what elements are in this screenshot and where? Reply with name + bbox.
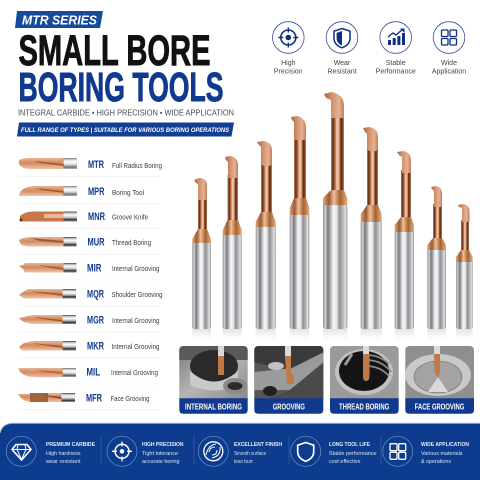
row: MPR: MPR — [88, 186, 105, 198]
benefit: wide application — [383, 436, 469, 466]
panel: internal boring — [179, 346, 248, 414]
row: MUR: MUR — [88, 236, 105, 248]
panel: grooving: GROOVING — [273, 401, 305, 411]
row: MTR: MTR — [88, 159, 104, 171]
title: BORING TOOLS — [18, 64, 223, 110]
row: MGR: Internal Grooving — [112, 318, 160, 325]
icon: wide application — [432, 22, 466, 76]
icon: stable performance: Stable — [386, 60, 406, 67]
panel: thread boring — [330, 346, 399, 414]
benefit: long tool life: LONG TOOL LIFE — [329, 442, 370, 448]
benefit: long tool life: Stable performance — [329, 451, 376, 457]
benefit: premium carbide: High hardness — [46, 451, 81, 457]
tool lineup — [192, 92, 473, 343]
row: MUR — [19, 236, 151, 248]
row: MQR: Shoulder Grooving — [112, 292, 163, 299]
benefit: excellent finish: less burr — [234, 459, 253, 465]
title: SMALL BORE — [18, 27, 210, 75]
row: MPR — [19, 186, 144, 198]
banner: range of types — [17, 122, 234, 136]
panel: internal boring: INTERNAL BORING — [185, 401, 242, 411]
panel: thread boring: THREAD BORING — [339, 401, 390, 411]
row: MTR: Full Radius Boring — [112, 163, 162, 170]
benefit: wide application: Various materials — [421, 451, 463, 457]
icon: wide application: Wide — [441, 60, 457, 67]
icon: stable performance — [376, 22, 416, 76]
benefit: wide application: & operations — [421, 459, 451, 465]
panel: grooving — [254, 346, 324, 414]
row: MQR — [19, 288, 163, 300]
row: MTR — [19, 158, 162, 171]
tool 4 — [290, 116, 309, 343]
row: MFR: Face Grooving — [110, 396, 150, 403]
row: MIL — [18, 366, 158, 378]
icon: wear resistant: Resistant — [327, 68, 357, 76]
row: MNR: Groove Knife — [112, 214, 148, 222]
icon: high precision — [272, 22, 304, 76]
benefit: high precision: accurate boring — [142, 459, 180, 465]
tool 2 — [223, 156, 242, 343]
icon: high precision: Precision — [274, 68, 303, 76]
row: MKR: Internal Grooving — [112, 344, 160, 351]
bottom benefits band — [0, 423, 480, 480]
row: MIR: Internal Grooving — [112, 266, 160, 273]
benefit: high precision — [107, 436, 184, 466]
row: MKR: MKR — [87, 340, 104, 352]
series badge: MTR SERIES — [22, 12, 97, 28]
tool 5 — [323, 92, 347, 343]
row: MIL: MIL — [86, 366, 100, 378]
benefit: premium carbide: wear resistant — [45, 459, 81, 465]
row: MFR: MFR — [86, 392, 102, 404]
row: MIR — [19, 262, 160, 274]
icon: stable performance: Performance — [376, 68, 416, 76]
row: MNR: MNR — [88, 211, 105, 223]
row: MIR: MIR — [87, 262, 102, 274]
row: MKR — [19, 340, 160, 352]
benefit: wide application: WIDE APPLICATION — [421, 442, 469, 448]
benefit: long tool life: cost effective — [329, 459, 360, 465]
tool 6 — [361, 127, 382, 343]
icon: wear resistant — [326, 22, 358, 76]
row: MQR: MQR — [87, 288, 104, 300]
icon: high precision: High — [281, 60, 296, 67]
benefit: excellent finish: Smooth surface — [234, 451, 266, 457]
benefit: high precision: HIGH PRECISION — [142, 442, 184, 448]
benefit: premium carbide: PREMIUM CARBIDE — [46, 442, 95, 448]
benefit: excellent finish: EXCELLENT FINISH — [234, 442, 282, 448]
row: MPR: Boring Tool — [112, 190, 144, 197]
tool 3 — [256, 141, 276, 343]
row: MUR: Thread Boring — [112, 240, 151, 247]
product type list — [18, 158, 163, 404]
banner: range of types: FULL RANGE OF TYPES | SUITABLE FOR VARIOUS BORING OPERATIONS — [21, 127, 230, 134]
tool 8 — [427, 186, 446, 343]
benefit: high precision: Tight tolerance — [142, 451, 178, 457]
feature icons row — [272, 22, 466, 76]
row: MFR — [18, 392, 150, 404]
benefit: premium carbide — [6, 436, 95, 466]
tool 7 — [395, 151, 414, 343]
tool 1 — [192, 178, 211, 343]
row: MGR: MGR — [87, 314, 104, 326]
row: MGR — [19, 314, 160, 326]
title — [18, 27, 223, 110]
tool 9 — [456, 204, 473, 343]
benefit: long tool life — [291, 436, 376, 466]
row: MIL: Internal Grooving — [111, 370, 158, 377]
icon: wear resistant: Wear — [334, 60, 351, 67]
benefit: excellent finish — [198, 436, 282, 466]
icon: wide application: Application — [432, 68, 466, 76]
panel: face grooving — [405, 346, 474, 414]
row: MNR — [20, 211, 148, 223]
tagline: INTEGRAL CARBIDE • HIGH PRECISION • WIDE APPLICATION — [18, 108, 234, 118]
